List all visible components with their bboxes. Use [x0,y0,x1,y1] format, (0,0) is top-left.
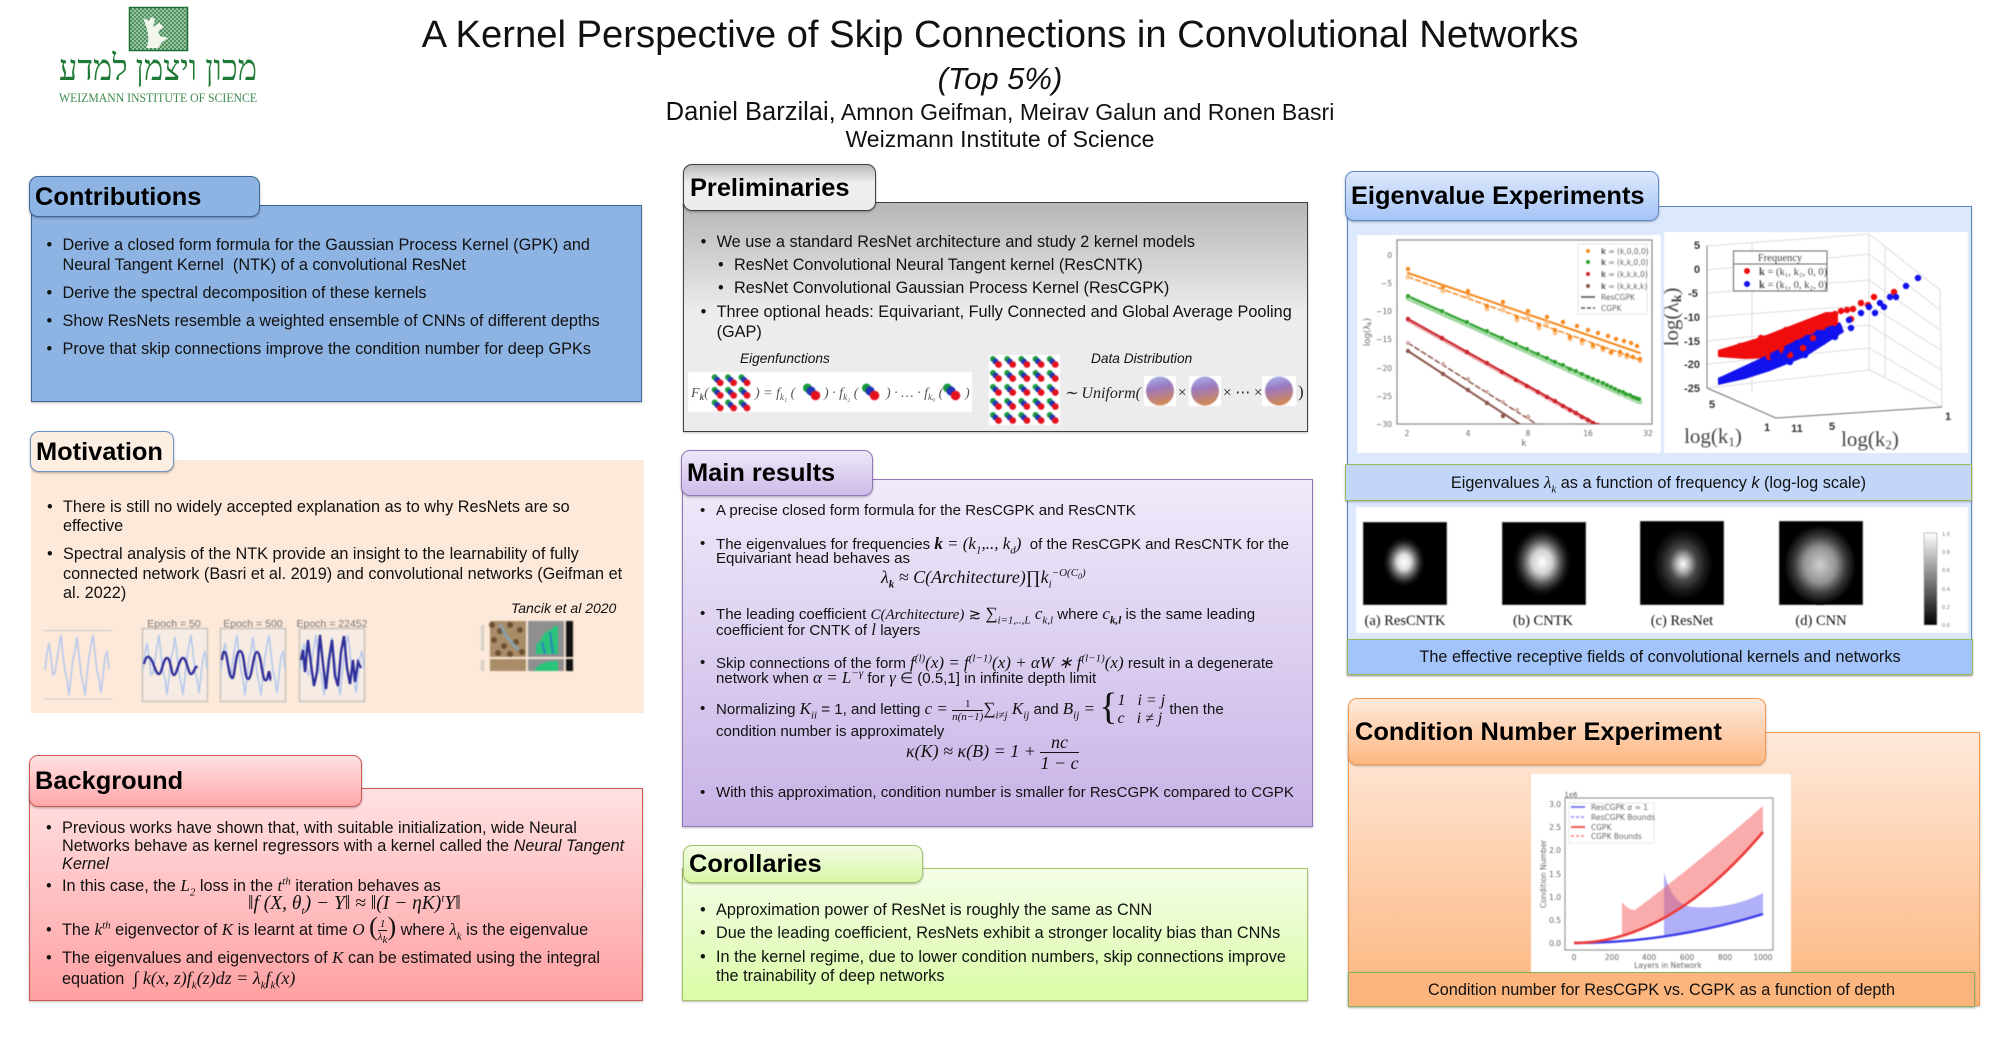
chart: log eigenvalue vs k line plot: −20 [1376,364,1392,373]
text block: background bullets: 1 [380,918,385,930]
panel: preliminaries [682,164,1309,434]
chart: 3D scatter of eigenvalues: k = (k₁, k₂, 0, 0) [1759,267,1828,278]
diagram: eigenfunction and data distribution formulas: ) · f [824,386,843,401]
text block: background bullets: Kernel [62,855,109,873]
text block: corollaries bullets: the trainability of deep networks [716,967,945,985]
chart: log eigenvalue vs k line plot: k = (k,k,k,k) [1601,282,1648,291]
text block: motivation bullets [48,498,622,602]
text block: corollaries bullets: Approximation power of ResNet is roughly the same as CNN [716,901,1152,919]
chart: log eigenvalue vs k line plot: 8 [1526,429,1531,438]
chart: spectral bias wave fits by epoch: Epoch = 22452 [297,618,368,630]
chart: log eigenvalue vs k line plot: log(λ [1363,325,1373,346]
diagram: eigenfunction and data distribution formulas: k₁ [780,392,787,402]
text block: corollaries bullets: Due the leading coefficient, ResNets exhibit a stronger locality bias than CNNs [716,924,1280,942]
chart: 3D scatter of eigenvalues: -15 [1684,336,1700,348]
chart: effective receptive field heat maps: 0.8 [1942,550,1950,556]
text block: contributions bullets: Derive the spectral decomposition of these kernels [62,284,427,302]
heading: motivation [30,431,174,472]
chart: log eigenvalue vs k line plot: 16 [1583,429,1593,438]
chart: condition number vs layers: CGPK Bounds [1591,832,1642,841]
heading: eigenvalue experiments: Eigenvalue Experiments [1351,182,1645,210]
label: data distribution: Data Distribution [1091,351,1192,366]
chart: effective receptive field heat maps: 0.2 [1942,605,1950,611]
chart: log eigenvalue vs k line plot: ResCGPK [1601,293,1636,302]
text block: background bullets [46,819,625,992]
text block: contributions bullets [47,236,600,358]
chart: effective receptive field heat maps: 0.6 [1942,568,1950,574]
chart: condition number vs layers: 2.0 [1549,846,1561,855]
chart: log eigenvalue vs k line plot: CGPK [1601,304,1623,313]
chart: effective receptive field heat maps: 0.0 [1942,623,1950,629]
diagram: eigenfunction and data distribution formulas: F [691,386,700,401]
heading: contributions: Contributions [35,183,201,211]
text block: preliminaries bullets: We use a standard ResNet architecture and study 2 kernel models [717,233,1195,251]
chart: 3D scatter of eigenvalues: 2 [1885,437,1892,452]
heading: corollaries: Corollaries [689,850,822,878]
text block: background bullets: Previous works have shown that, with suitable initialization, wide Neural [62,819,577,837]
affiliation: Weizmann Institute of Science [846,126,1154,152]
citation: Tancik et al 2020: Tancik et al 2020 [511,600,616,616]
chart: effective receptive field heat maps: (d) CNN [1795,613,1847,629]
chart: log eigenvalue vs k line plot: −5 [1381,279,1392,288]
diagram: eigenfunction and data distribution formulas: ) = f [755,386,780,401]
chart: log eigenvalue vs k line plot: k = (k,k,0,0) [1601,258,1648,267]
text block: main results bullets and formulas: The eigenvalues for frequencies k = (k1,.., kd) of the ResCGPK and ResCNTK for the [716,534,1289,556]
text block: main results bullets and formulas [700,502,1294,801]
chart: effective receptive field heat maps: 1.0 [1942,532,1950,538]
panel: motivation [28,430,644,713]
panel: contributions [28,176,643,404]
heading: main results [681,450,873,496]
text block: main results bullets and formulas: 1 [965,698,970,710]
chart: log eigenvalue vs k line plot: −30 [1376,420,1392,429]
chart: condition number vs layers: ResCGPK Bounds [1591,813,1655,822]
chart: condition number vs layers: 2.5 [1549,823,1561,832]
text block: preliminaries bullets: ResNet Convolutional Neural Tangent kernel (ResCNTK) [734,256,1143,274]
chart: condition number vs layers [1530,774,1792,972]
heading: eigenvalue experiments [1345,171,1659,221]
image: coordinate network samples [480,620,574,672]
diagram: eigenfunction and data distribution formulas: ) · … · f [886,386,928,401]
chart: 3D scatter of eigenvalues: -10 [1684,312,1700,324]
text block: main results bullets and formulas: λk ≈ C(Architecture)∏ki−O(C0) [881,567,1086,591]
diagram: eigenfunction and data distribution formulas: ( [935,386,945,401]
text block: main results bullets and formulas: Skip connections of the form f(l)(x) = f(l−1)(x) + αW ∗ f(l−1)(x) result in a degenerate [716,652,1273,672]
panel: condition number experiment [1346,698,1981,1009]
diagram: eigenfunction and data distribution formulas [688,355,1304,425]
chart: 3D scatter of eigenvalues: 5 [1694,240,1700,252]
text block: contributions bullets: Prove that skip connections improve the condition number for deep GPKs [62,340,591,358]
text block: preliminaries bullets: Three optional heads: Equivariant, Fully Connected and Global Average Pooling [717,303,1292,321]
chart: 3D scatter of eigenvalues: Frequency [1758,253,1803,264]
text block: background bullets: Networks behave as kernel regressors with a kernel called the Neural Tangent [62,837,624,855]
diagram: eigenfunction and data distribution formulas: ∼ Uniform( [1064,385,1143,402]
caption: effective receptive fields [1347,639,1973,675]
diagram: eigenfunction and data distribution formulas: × [1178,385,1186,401]
chart: condition number vs layers: CGPK [1591,823,1613,832]
diagram: eigenfunction and data distribution formulas: k₂ [843,392,850,402]
chart: log eigenvalue vs k line plot: ) [1363,318,1373,321]
chart: 3D scatter of eigenvalues: 5 [1829,421,1835,433]
chart: condition number vs layers: ResCGPK α = 1 [1591,803,1648,812]
chart: condition number vs layers: 0 [1572,953,1577,962]
text block: background bullets: λk [378,931,387,946]
text block: background bullets: equation ∫ k(x, z)fk(z)dz = λkfk(x) [62,968,295,992]
heading: corollaries [683,845,923,883]
chart: log eigenvalue vs k line plot: −15 [1376,335,1392,344]
chart: 3D scatter of eigenvalues: 1 [1728,434,1735,449]
chart: 3D scatter of eigenvalues [1663,232,1968,454]
logo: Weizmann Institute of Science [59,6,257,105]
chart: 3D scatter of eigenvalues: -20 [1684,359,1700,371]
chart: effective receptive field heat maps: (c) ResNet [1651,613,1713,629]
text block: contributions bullets: Show ResNets resemble a weighted ensemble of CNNs of different depths [62,312,600,330]
chart: 3D scatter of eigenvalues: log(k [1684,424,1728,448]
heading: condition number experiment: Condition Number Experiment [1355,718,1722,746]
chart: 3D scatter of eigenvalues: 1 [1945,411,1951,423]
chart: spectral bias wave fits by epoch: Epoch = 500 [223,618,283,630]
text block: main results bullets and formulas: coefficient for CNTK of l layers [716,620,920,639]
text block: corollaries bullets [700,901,1286,985]
chart: spectral bias wave fits by epoch [44,618,368,703]
text block: preliminaries bullets: (GAP) [717,323,762,341]
text block: background bullets: ‖f (X, θt) − Y‖ ≈ ‖(I − ηK)tY‖ [248,892,461,917]
chart: condition number vs layers: Layers in Network [1634,961,1703,970]
chart: log eigenvalue vs k line plot: −25 [1376,392,1392,401]
text block: background bullets: The eigenvalues and eigenvectors of K can be estimated using the integral [62,948,600,967]
text block: motivation bullets: Spectral analysis of the NTK provide an insight to the learnability of fully [63,545,579,563]
chart: log eigenvalue vs k line plot: 2 [1405,429,1410,438]
chart: log eigenvalue vs k line plot: −10 [1376,307,1392,316]
diagram: eigenfunction and data distribution formulas: ) [1298,382,1304,401]
chart: condition number vs layers: 600 [1680,953,1694,962]
chart: condition number vs layers: 1.5 [1549,870,1561,879]
chart: log eigenvalue vs k line plot: 0 [1387,251,1392,260]
label: eigenfunctions: Eigenfunctions [740,351,830,366]
text block: background bullets: The kth eigenvector of K is learnt at time O ( ) where λk is the eigenvalue [62,912,588,942]
chart: effective receptive field heat maps: (b) CNTK [1513,613,1574,629]
heading: preliminaries [683,164,876,211]
heading: main results: Main results [687,459,835,487]
panel: corollaries [681,844,1309,1003]
chart: 3D scatter of eigenvalues: k [1670,294,1685,302]
chart: log eigenvalue vs k line plot: k [1366,321,1374,325]
text block: contributions bullets: Derive a closed form formula for the Gaussian Process Kernel (GPK) and [62,236,590,254]
text block: preliminaries bullets: ResNet Convolutional Gaussian Process Kernel (ResCGPK) [734,279,1169,297]
chart: log eigenvalue vs k line plot: 32 [1643,429,1653,438]
chart: 3D scatter of eigenvalues: log(k [1841,427,1885,451]
text block: main results bullets and formulas: κ(K) ≈ κ(B) = 1 + [906,741,1036,761]
caption: eigenvalues vs frequency: Eigenvalues λk as a function of frequency k (log-log scale) [1451,472,1866,495]
text block: main results bullets and formulas: 1 i = j c i ≠ j [1117,692,1165,727]
heading: background: Background [35,767,183,795]
text block: corollaries bullets: In the kernel regime, due to lower condition numbers, skip connections improve [716,948,1286,966]
diagram: eigenfunction and data distribution formulas: × ⋯ × [1223,385,1262,401]
heading: motivation: Motivation [36,438,163,466]
chart: log eigenvalue vs k line plot: k [1521,439,1527,449]
subtitle: top 5%: (Top 5%) [938,61,1062,96]
diagram: eigenfunction and data distribution formulas: ) [964,386,970,401]
caption: condition number vs depth [1348,972,1975,1007]
panel: eigenvalue experiments [1344,170,1974,678]
chart: condition number vs layers: 800 [1718,953,1732,962]
caption: effective receptive fields: The effective receptive fields of convolutional kernels and networks [1419,648,1901,666]
text block: contributions bullets: Neural Tangent Kernel (NTK) of a convolutional ResNet [62,256,466,274]
authors: Daniel Barzilai, Amnon Geifman, Meirav Galun and Ronen Basri [666,98,1334,126]
chart: condition number vs layers: 200 [1605,953,1619,962]
text block: motivation bullets: There is still no widely accepted explanation as to why ResNets are so [63,498,570,516]
chart: 3D scatter of eigenvalues: 11 [1791,423,1803,435]
diagram: eigenfunction and data distribution formulas: ( [704,386,710,401]
chart: condition number vs layers: 1.0 [1549,893,1561,902]
heading: condition number experiment [1348,698,1766,765]
text block: main results bullets and formulas: The leading coefficient C(Architecture) ≳ ∑i=1,..,L ck,l where ck,l is the same leading [716,604,1255,626]
diagram: eigenfunction and data distribution formulas: k [700,392,705,402]
text block: motivation bullets: al. 2022) [63,584,126,602]
chart: condition number vs layers: 1000 [1753,953,1773,962]
chart: log eigenvalue vs k line plot: k = (k,k,k,0) [1601,270,1648,279]
chart: condition number vs layers: Condition Number [1539,839,1548,908]
chart: 3D scatter of eigenvalues: k = (k₁, 0, k₂, 0) [1759,280,1828,291]
text block: background bullets: In this case, the L2 loss in the tth iteration behaves as [62,875,441,898]
diagram: eigenfunction and data distribution formulas: ( [787,386,797,401]
chart: log eigenvalue vs k line plot: 4 [1466,429,1471,438]
chart: condition number vs layers: 0.5 [1549,916,1561,925]
text block: main results bullets and formulas: n(n−1) [952,711,983,723]
caption: eigenvalues vs frequency [1345,464,1972,501]
panel: main results [680,450,1314,829]
chart: effective receptive field heat maps: 0.4 [1942,587,1950,593]
text block: main results bullets and formulas: A precise closed form formula for the ResCGPK and ResCNTK [716,502,1136,519]
chart: 3D scatter of eigenvalues: -25 [1684,383,1700,395]
text block: main results bullets and formulas: With this approximation, condition number is smaller for ResCGPK compared to CGPK [716,784,1294,801]
diagram: eigenfunction and data distribution formulas: k₉ [928,392,935,402]
chart: effective receptive field heat maps: (a) ResCNTK [1365,613,1446,629]
chart: 3D scatter of eigenvalues: 1 [1764,422,1770,434]
heading: preliminaries: Preliminaries [690,174,850,202]
heading: background [29,755,362,807]
panel: background [28,754,644,1003]
heading: contributions [29,176,260,217]
text block: main results bullets and formulas: Equivariant head behaves as [716,550,910,567]
chart: 3D scatter of eigenvalues: 0 [1694,264,1700,276]
text block: motivation bullets: effective [63,517,123,535]
text block: preliminaries bullets [701,233,1292,341]
text block: main results bullets and formulas: Normalizing Kii = 1, and letting c = ∑i≠j Kij and Bij = { then the [716,686,1224,728]
chart: 3D scatter of eigenvalues: ) [1892,427,1899,451]
chart: condition number vs layers: 3.0 [1549,800,1561,809]
diagram: eigenfunction and data distribution formulas: ( [850,386,860,401]
chart: condition number vs layers: 0.0 [1549,939,1561,948]
text block: main results bullets and formulas: 1 − c [1040,753,1079,773]
chart: log eigenvalue vs k line plot: k = (k,0,0,0) [1601,247,1649,256]
chart: 3D scatter of eigenvalues: ) [1735,424,1742,448]
text block: main results bullets and formulas: condition number is approximately [716,723,944,740]
text block: motivation bullets: connected network (Basri et al. 2019) and convolutional networks (Geifman et [63,565,622,583]
chart: 3D scatter of eigenvalues: -5 [1688,288,1698,300]
chart: condition number vs layers: 1e6 [1564,791,1578,799]
chart: condition number vs layers: 400 [1642,953,1656,962]
title: A Kernel Perspective of Skip Connections in Convolutional Networks [422,13,1578,56]
caption: condition number vs depth: Condition number for ResCGPK vs. CGPK as a function of depth [1428,980,1895,998]
chart: 3D scatter of eigenvalues: 5 [1709,399,1715,411]
text block: main results bullets and formulas: network when α = L−γ for γ ∈ (0.5,1] in infinite depth limit [716,667,1096,687]
chart: log eigenvalue vs k line plot [1356,234,1662,454]
text block: main results bullets and formulas: nc [1051,732,1068,752]
chart: effective receptive field heat maps [1356,506,1968,634]
chart: spectral bias wave fits by epoch: Epoch = 50 [147,618,201,630]
